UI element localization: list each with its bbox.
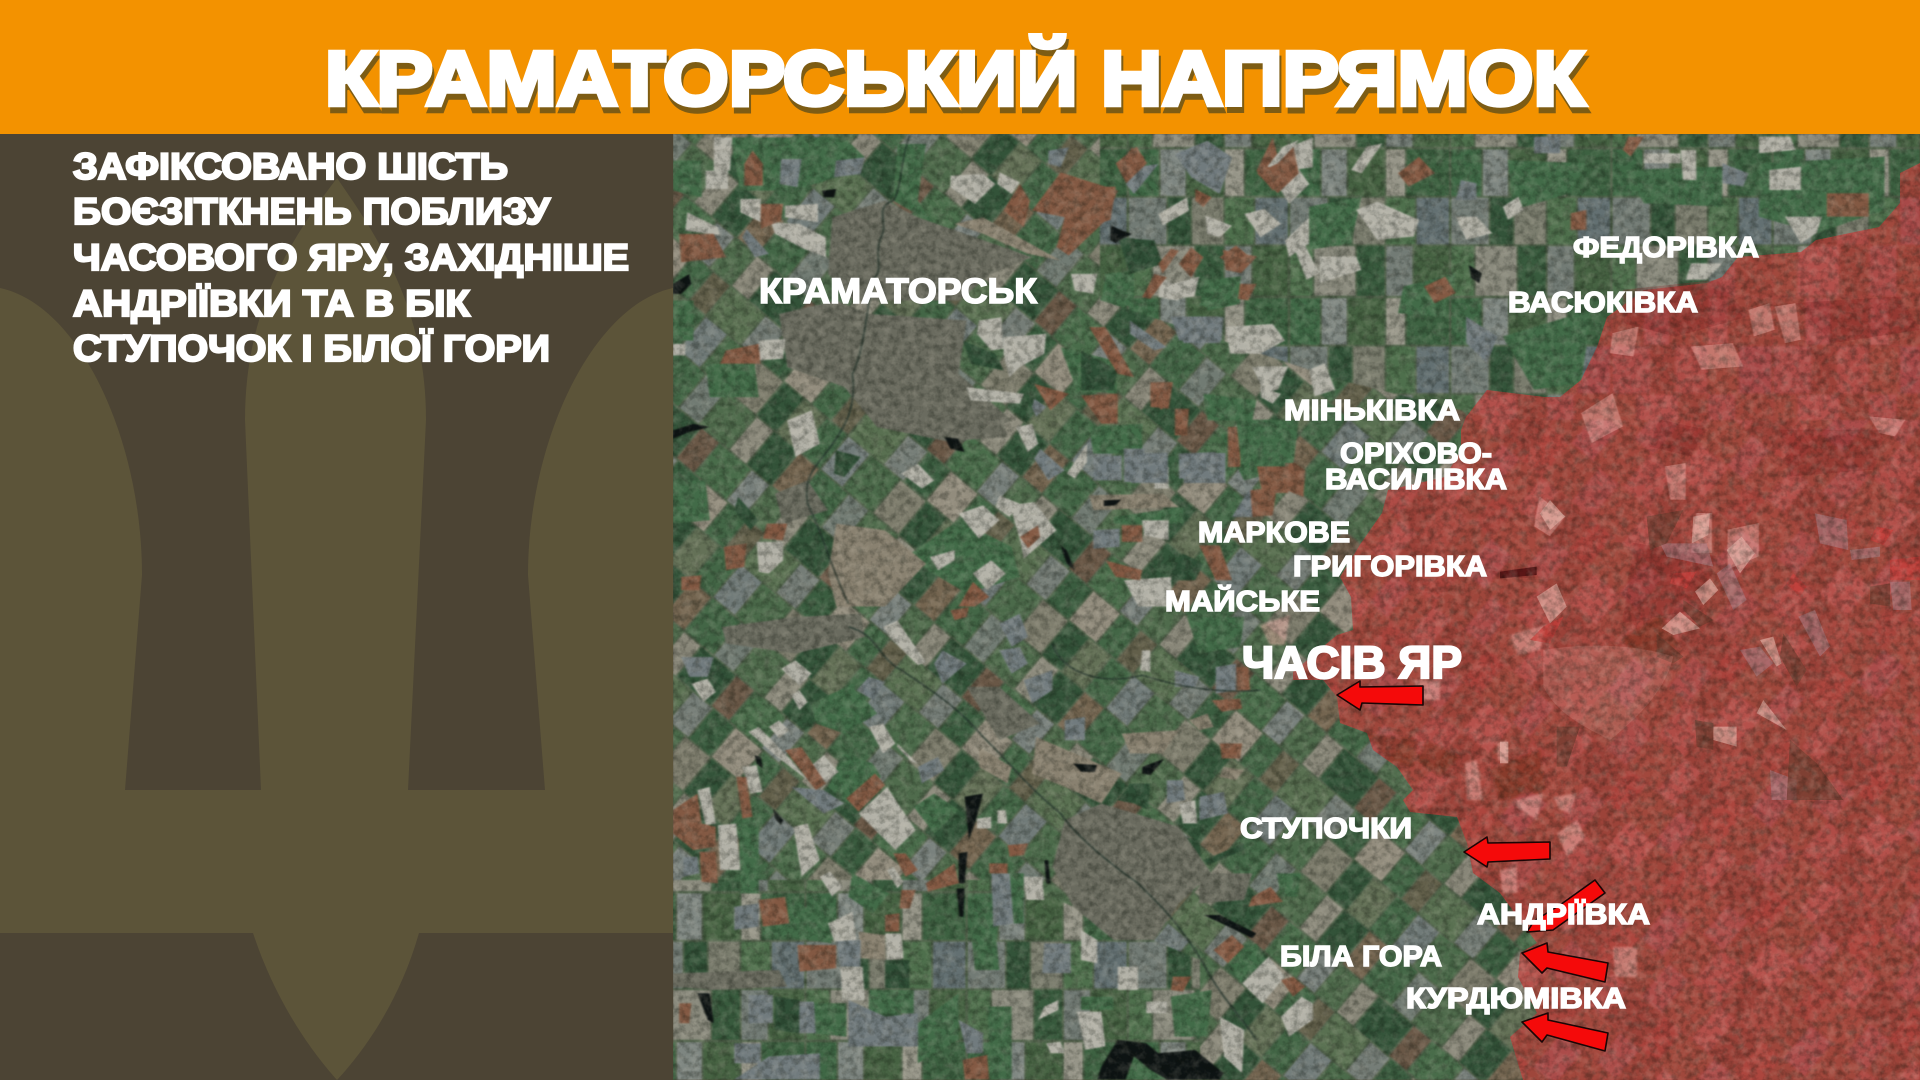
text block: summary: ЧАСОВОГО ЯРУ, ЗАХІДНІШЕ — [73, 237, 629, 278]
label: Kramatorsk: КРАМАТОРСЬК — [759, 272, 1038, 311]
label: Hryhorivka: ГРИГОРІВКА — [1293, 551, 1487, 583]
text block: summary: АНДРІЇВКИ ТА В БІК — [73, 283, 470, 324]
occupied territory: red overlay — [1293, 163, 1920, 1080]
map texture — [673, 134, 1920, 1080]
arrow: Chasiv Yar — [1337, 681, 1423, 710]
header bar — [0, 0, 1920, 134]
map fields: northern sector — [673, 136, 1313, 607]
text block: summary: БОЄЗІТКНЕНЬ ПОБЛИЗУ — [73, 191, 551, 232]
panel: left olive background with trident — [0, 134, 673, 1080]
arrow: Stupochky — [1464, 837, 1550, 867]
title: КРАМАТОРСЬКИЙ НАПРЯМОК — [325, 34, 1586, 122]
label: Vasiukivka: ВАСЮКІВКА — [1508, 287, 1698, 319]
text block: summary — [73, 146, 629, 369]
map fields: southern sector — [673, 607, 1313, 1080]
text block: summary: ЗАФІКСОВАНО ШІСТЬ — [73, 146, 508, 187]
label: Orikhovo-Vasylivka — [1325, 438, 1507, 496]
arrow: Kurdiumivka — [1522, 1013, 1608, 1051]
arrow: Bila Hora — [1522, 943, 1608, 982]
map fields: eastern sector — [1100, 137, 1884, 493]
map panel: satellite view — [673, 134, 1920, 1080]
arrow: Andriivka — [1527, 880, 1605, 932]
label: Andriivka: АНДРІЇВКА — [1477, 898, 1650, 931]
icon: trident emblem — [0, 178, 673, 1080]
red zone city area — [1543, 646, 1673, 740]
map labels — [759, 232, 1759, 1015]
red zone fields — [1260, 280, 1920, 977]
label: Maiske: МАЙСЬКЕ — [1165, 584, 1320, 618]
label: Markove: МАРКОВЕ — [1198, 517, 1350, 549]
label: Kurdiumivka: КУРДЮМІВКА — [1406, 983, 1626, 1015]
text block: summary: СТУПОЧОК І БІЛОЇ ГОРИ — [73, 328, 550, 369]
label: Minkivka: МІНЬКІВКА — [1284, 395, 1460, 427]
label: Orikhovo-Vasylivka: ОРІХОВО- — [1340, 438, 1492, 470]
label: Orikhovo-Vasylivka: ВАСИЛІВКА — [1325, 464, 1507, 496]
label: Bila Hora: БІЛА ГОРА — [1280, 941, 1442, 973]
label: Chasiv Yar: ЧАСІВ ЯР — [1242, 637, 1462, 688]
label: Stupochky: СТУПОЧКИ — [1240, 813, 1412, 845]
label: Fedorivka: ФЕДОРІВКА — [1573, 232, 1759, 264]
